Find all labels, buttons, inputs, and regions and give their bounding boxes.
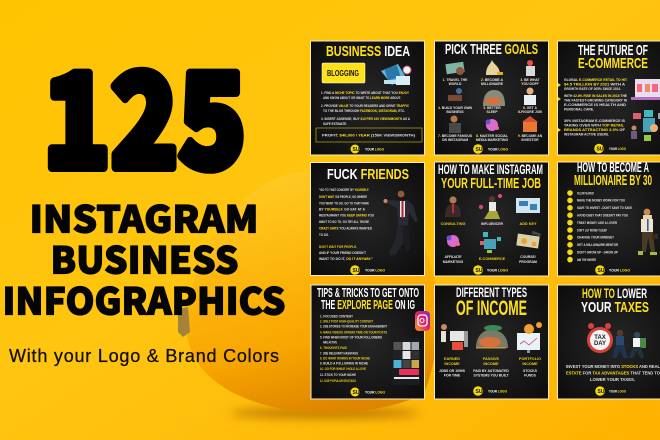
goal labels: INVESTOR (521, 138, 539, 142)
icon: Instagram logo (415, 311, 430, 331)
bullet text: BRANDS ATTRACTING 3.3% OF (564, 128, 626, 132)
numbered list: DON'T LET MONEY SLEEP (577, 228, 607, 232)
logo (594, 144, 626, 153)
goal labels: 6. GET A (523, 106, 538, 110)
quote: AND IF YOUR FRIEND DOESN'T (319, 251, 367, 255)
panel heading (438, 161, 543, 192)
panel: How to lower your taxes (558, 285, 660, 399)
bullet text: $4.5 TRILLION BY 2021 WITH A (564, 82, 625, 86)
panel heading (574, 159, 652, 189)
logo: YOUR LOGO (365, 390, 385, 394)
goal labels: 4. BUILD YOUR OWN (438, 106, 473, 110)
logo (350, 265, 385, 275)
tips list: 10. GO FOR WHILE I HOLD A LOVE (320, 367, 366, 371)
tips list: ARE ACTIVE (323, 340, 337, 344)
logo (473, 265, 508, 275)
panel heading: DIFFERENT TYPES (456, 284, 527, 300)
photo: yellow lemon (178, 171, 439, 413)
panel heading: HOW TO MAKE INSTAGRAM (438, 161, 543, 177)
income labels: PORTFOLIO (519, 357, 541, 361)
bullet text: TAKING OVER WITH TOP RETAIL (564, 124, 625, 128)
goal labels: 7. BECOME FAMOUS (438, 134, 473, 138)
profit box: PROFIT: $40,000 / YEAR (150K VIEWS/MONTH) (322, 134, 416, 138)
panel: Fuck Friends (310, 162, 424, 276)
tips list: 11. STICK TO YOUR NICHE (320, 373, 356, 377)
tips list (320, 314, 388, 383)
quote: "GO TO THAT CONCERT BY YOURSELF. (319, 188, 369, 192)
panel heading (456, 284, 527, 320)
bullet text (558, 78, 628, 136)
job labels: AFFILIATE (444, 255, 462, 259)
quote (319, 188, 374, 261)
numbered list: DON'T GROW UP - GROW UP (577, 250, 618, 254)
quote: CRAZY SHITS YOU ALWAYS WANTED (319, 226, 372, 230)
income labels: PASSIVE (483, 357, 500, 361)
logo: YOUR LOGO (487, 268, 508, 272)
tips list: 5. FIND WHEN MOST OF YOUR FOLLOWERS (320, 336, 382, 340)
goal labels: SLEEP (486, 110, 498, 114)
panel: The Future of E-Commerce (558, 41, 660, 155)
goal labels: 2. BECOME A (481, 78, 504, 82)
job labels: E-COMMERCE (479, 257, 506, 261)
logo: SU (596, 146, 604, 152)
bullet text: GLOBAL E-COMMERCE RETAIL TO HIT (564, 78, 628, 82)
numbered list: FOLLOW THE MONEY (577, 191, 594, 195)
quote: TO DO. (319, 233, 329, 237)
panel: Pick Three Goals (434, 41, 548, 155)
numbered list: CHANGE YOUR MINDSET (577, 236, 615, 240)
logo (595, 265, 630, 275)
instructions: 1. FIND A NICHE TOPIC TO WRITE ABOUT THAT YOU ENJOY (321, 91, 410, 95)
job labels (441, 222, 537, 264)
instructions: TO THE BLOG THROUGH FACEBOOK, INSTAGRAM, ETC. (323, 109, 405, 113)
heading: Instagram Business Infographics: INSTAGRAM (30, 190, 258, 244)
quote: WANT TO GO TO. GO TRY ALL THOSE (319, 220, 369, 224)
bullet text: E-COMMERCE IS HEALTH AND (564, 103, 626, 107)
income labels: SYSTEMS YOU BUILT (473, 374, 509, 378)
job labels: MARKETING (443, 260, 464, 264)
income labels: JOBS OR 1099S (439, 369, 466, 373)
panel heading: PICK THREE GOALS (445, 41, 538, 58)
panel heading: TIPS & TRICKS TO GET ONTO (317, 285, 419, 300)
icon: tax day alarm clock: DAY (594, 341, 606, 347)
quote: BY YOURSELF. GO EAT AT A (319, 208, 365, 212)
goal labels: 6-FIGURE JOB (518, 110, 542, 114)
lemon shadow (230, 408, 420, 418)
tips list: 1. FOCUSED CONTENT (320, 314, 354, 318)
panel: Business Idea (310, 41, 424, 155)
bullet text: INSTAGRAM ACTIVE USERS. (564, 132, 609, 136)
numbered list: SAVE TO INVEST - DON'T SAVE TO SAVE (577, 206, 632, 210)
heading: Instagram Business Infographics (2, 190, 286, 326)
tips list: 9. BUILD A FOLLOWING IN NICHE (320, 362, 368, 366)
panel heading: BUSINESS IDEA (326, 43, 410, 60)
logo: YOUR LOGO (488, 148, 508, 152)
goal labels: 5. BETTER (483, 106, 501, 110)
bullet text: GROWTH RATE OF 265% SINCE 2014. (564, 87, 621, 91)
big number 125: 125 (43, 18, 246, 206)
goal labels: 9. BECOME AN (518, 134, 543, 138)
tips list: 4. MAKE VIDEOS OFFERS TIME ON YOUR POSTS (320, 330, 387, 334)
panel: Explore page tips (311, 285, 430, 399)
numbered list: AVOID DEBT THAT DOESN'T PAY YOU (577, 214, 628, 218)
numbered list: GET A MILLIONAIRE MENTOR (577, 243, 618, 247)
logo: YOUR LOGO (609, 147, 626, 151)
goal labels: 8. MASTER SOCIAL (476, 134, 508, 138)
bullet text: THE FASTEST-GROWING CATEGORY IN (564, 98, 627, 102)
figure: businessman (384, 191, 418, 256)
panel heading: OF INCOME (456, 297, 527, 320)
quote: YOU WANT TO GO. GO TO THAT PARK (319, 202, 369, 206)
logo (350, 388, 385, 396)
income labels: FOR TIME (444, 374, 461, 378)
goal labels: MILLIONAIRE (481, 82, 504, 86)
icon: online shop (631, 79, 660, 100)
instructions: 2. PROVIDE VALUE TO YOUR READERS AND DRIVE TRAFFIC (321, 104, 409, 108)
logo: SU (476, 147, 483, 153)
logo: YOUR LOGO (365, 268, 385, 272)
income icons (441, 322, 542, 353)
icon: computer (381, 64, 411, 85)
logo (595, 386, 626, 396)
instructions: 3. INSERT ADSENSE, BUY $10 PER 100 VIEWS/MONTH AS A (321, 117, 410, 121)
panel: How to become a millionaire by 30 (558, 159, 660, 276)
quote: RESTAURANT YOU KEEP SAYING YOU (319, 214, 374, 218)
job labels: CONSULTING (441, 222, 465, 226)
icon: phone with explore grid (392, 338, 420, 385)
income labels: PAID BY AUTOMATED (473, 369, 509, 373)
advice text: LOWER YOUR TAXES. (590, 377, 635, 382)
income labels: INCOME (522, 362, 538, 366)
heading: Instagram Business Infographics: BUSINESS (50, 230, 238, 284)
income labels (439, 357, 541, 378)
logo: YOUR LOGO (609, 268, 630, 272)
logo: SU (598, 389, 605, 395)
numbered list: MAKE THE MONEY WORK FOR YOU (577, 199, 625, 203)
income labels: STOCKS (523, 369, 538, 373)
panel heading (317, 285, 419, 312)
goal icons (445, 60, 538, 133)
logo (350, 144, 384, 154)
job labels: INFLUENCER (481, 222, 503, 226)
goal labels: 3. BE WHAT (520, 78, 541, 82)
goal labels: YOU DOFF (521, 82, 539, 86)
panel heading: THE EXPLORE PAGE ON IG (321, 297, 415, 312)
logo (473, 144, 508, 154)
income labels: FUNDS (524, 374, 537, 378)
instructions: AND KNOW ABOUT OR WANT TO LEARN MORE ABOUT. (323, 96, 401, 100)
tips list: 3. USE STORIES TO INCREASE YOUR ENGAGEMENT (320, 324, 388, 328)
lemon stem nub (178, 307, 190, 337)
panel: Different types of income (434, 284, 548, 399)
job labels: PROGRAM (519, 260, 537, 264)
logo: SU (352, 147, 360, 153)
advice text: ESTATE FOR TAX ADVANTAGES THAT TEND TO (566, 370, 660, 376)
logo: SU (476, 389, 483, 395)
logo: SU (352, 390, 360, 396)
heading: Instagram Business Infographics: INFOGRAPHICS (2, 272, 286, 326)
tips list: 8. DO WHAT WORKS IN YOUR NICHE (320, 356, 370, 360)
logo: SU (352, 268, 360, 274)
advice text: INVEST YOUR MONEY INTO STOCKS AND REAL (566, 364, 660, 369)
instructions (321, 91, 410, 126)
goal labels: ON INSTAGRAM (442, 138, 468, 142)
icon: tax day alarm clock (587, 323, 613, 353)
job icons (445, 194, 541, 253)
job labels: ADD KEY (519, 222, 537, 226)
numbered list: AIM THE HIGHER (577, 258, 596, 262)
goal labels: BUSINESS (446, 110, 464, 114)
tagline: With your Logo & Brand Colors (9, 346, 279, 366)
bullet text: 30% INSTAGRAM E-COMMERCE IS (564, 119, 626, 123)
job labels: COURSE/ (520, 255, 536, 259)
tips list: 12. USE POPULAR GEOTAGS (320, 379, 356, 383)
quote: DON'T WAIT ON PEOPLE, GO WHERE (319, 195, 367, 199)
logo: YOUR LOGO (609, 390, 626, 394)
goal labels: 1. TRAVEL THE (443, 78, 468, 82)
logo: SU (476, 268, 483, 274)
panel heading: FUCK FRIENDS (327, 166, 409, 183)
goal labels (438, 78, 543, 142)
quote: WANT TO DO IT, DO IT ANYWAY." (319, 257, 373, 261)
panel: How to make Instagram your full-time job (434, 161, 548, 276)
panel heading (581, 285, 649, 316)
income labels: EARNED (444, 357, 460, 361)
bullet text: WITH 42.8% RISE IN SALES IN 2018 THE (564, 94, 628, 98)
goal labels: WORLD (449, 82, 462, 86)
logo: SU (598, 268, 605, 274)
numbered list: TREAT MONEY LIKE A LOVER (577, 221, 617, 225)
quote: DON'T WAIT FOR PEOPLE. (319, 245, 357, 249)
icon: mobile e-commerce (631, 110, 660, 141)
logo (473, 386, 507, 396)
tips list: 2. ONLY POST HIGH-QUALITY CONTENT (320, 320, 374, 324)
bullet text: PERSONAL CARE. (564, 108, 594, 112)
logo: YOUR LOGO (488, 390, 507, 394)
advice text (566, 364, 660, 382)
blogging label: BLOGGING (327, 69, 359, 78)
numbered list (567, 190, 632, 262)
tips list: 7. USE RELEVANT HASHTAGS (320, 352, 358, 356)
icon: tax day alarm clock: TAX (594, 335, 606, 341)
logo: YOUR LOGO (365, 148, 384, 152)
instructions: SAFE ESTIMATE. (323, 122, 347, 126)
panel heading (578, 42, 648, 72)
income labels: INCOME (483, 362, 499, 366)
goal labels: MEDIA MARKETING (476, 138, 508, 142)
income labels: INCOME (444, 362, 460, 366)
tips list: 6. THOUGHTS PAID (320, 346, 347, 350)
figures: running people (612, 330, 646, 358)
figure: man with briefcase (638, 209, 658, 255)
panel heading: YOUR FULL-TIME JOB (441, 175, 541, 192)
